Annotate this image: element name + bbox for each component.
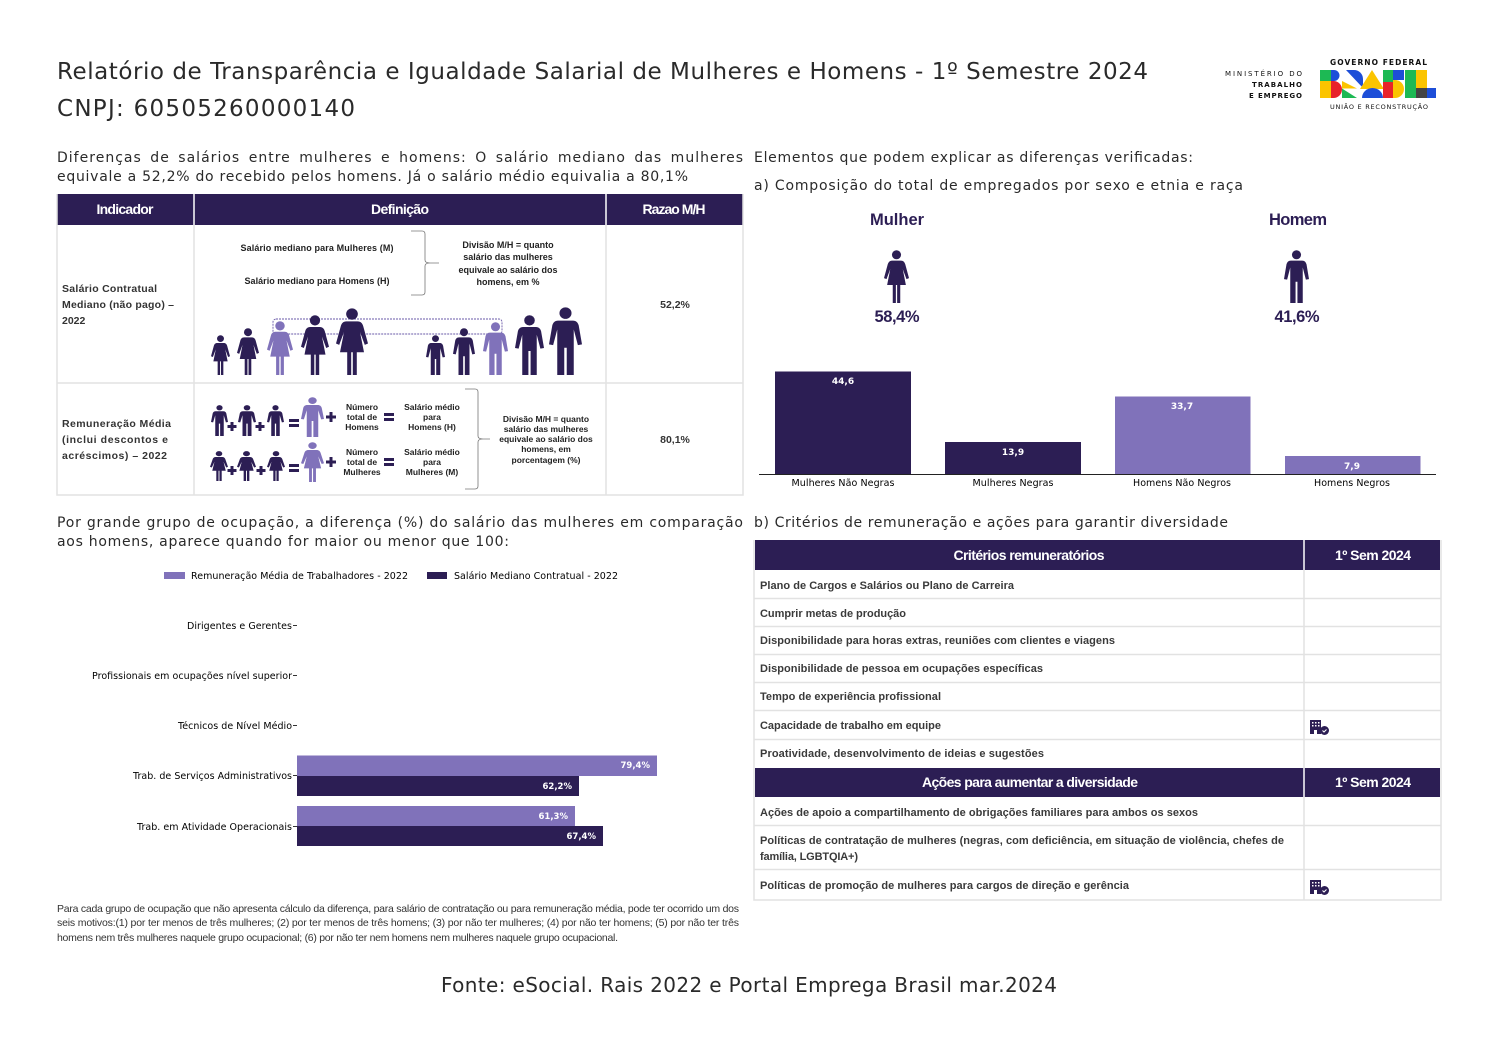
row: salário contratual mediano: Salário mediano para Homens (H) — [244, 276, 390, 286]
homem: Homem — [1269, 211, 1327, 229]
row: salário contratual mediano: 2022 — [62, 315, 86, 327]
row: salário contratual mediano: 52,2% — [660, 299, 691, 311]
bar chart: composição por etnia e raça: 33,7 — [1171, 402, 1193, 412]
rows: critérios: Capacidade de trabalho em equipe — [760, 720, 941, 732]
row: remuneração média: 80,1% — [660, 434, 691, 446]
rows: critérios: Cumprir metas de produção — [760, 608, 906, 620]
bar chart: ocupação: Trab. de Serviços Administrativos — [132, 771, 292, 782]
bar chart: composição por etnia e raça: 44,6 — [832, 377, 854, 387]
row: remuneração média: equivale ao salário dos — [499, 434, 593, 444]
heading: critérios de remuneração: b) Critérios de remuneração e ações para garantir diversidade — [754, 515, 1228, 531]
footnote: homens nem três mulheres naquele grupo ocupacional; (6) por não ter nem homens nem mulheres naquele grupo ocupacional. — [57, 932, 618, 944]
header: ações para aumentar a diversidade: Ações para aumentar a diversidade — [922, 774, 1138, 790]
title: CNPJ: 60505260000140 — [57, 96, 355, 122]
row: remuneração média: (inclui descontos e — [62, 434, 168, 446]
row: remuneração média: para — [423, 457, 441, 467]
header: critérios remuneratórios — [755, 540, 1440, 570]
logo: ministério e governo federal: UNIÃO E RECONSTRUÇÃO — [1330, 102, 1428, 111]
intro text: diferenças de salários — [57, 150, 743, 185]
panel: tabela de indicadores — [57, 194, 743, 495]
intro text: diferenças de salários: equivale a 52,2% do recebido pelos homens. Já o salário médio equivalia a 80,1% — [57, 169, 688, 185]
bar chart: ocupação: 79,4% — [620, 761, 650, 771]
logo: ministério e governo federal: E EMPREGO — [1249, 92, 1302, 100]
rows: critérios: Disponibilidade de pessoa em ocupações específicas — [760, 663, 1043, 675]
row: remuneração média: total de — [347, 457, 377, 467]
header: critérios remuneratórios: 1º Sem 2024 — [1335, 547, 1411, 563]
row: remuneração média: porcentagem (%) — [512, 455, 581, 465]
row: remuneração média: para — [423, 412, 441, 422]
icons: equação mulheres — [210, 442, 394, 482]
rows: critérios: Proatividade, desenvolvimento de ideias e sugestões — [760, 748, 1044, 760]
row: salário contratual mediano: Divisão M/H = quanto — [462, 240, 554, 250]
row: remuneração média: Remuneração Média — [62, 418, 171, 430]
row: salário contratual mediano: salário das mulheres — [463, 252, 553, 262]
bar chart: ocupação: Dirigentes e Gerentes — [187, 621, 292, 632]
rows: ações: Políticas de contratação de mulheres (negras, com deficiência, em situação de violência, chefes de — [760, 835, 1284, 847]
rows: critérios: Tempo de experiência profissional — [760, 691, 941, 703]
footnote: Para cada grupo de ocupação que não apresenta cálculo da diferença, para salário de contratação ou para remuneração média, pode ter ocorrido um dos — [57, 903, 739, 915]
legend: Remuneração Média de Trabalhadores - 2022 — [191, 571, 408, 582]
header: critérios remuneratórios: Critérios remuneratórios — [954, 547, 1105, 563]
homem — [1269, 211, 1327, 326]
row: remuneração média: Mulheres (M) — [406, 467, 458, 477]
rows: ações — [760, 807, 1284, 892]
rows: ações: Políticas de promoção de mulheres para cargos de direção e gerência — [760, 880, 1130, 892]
table header: Definição — [371, 201, 429, 217]
table header — [57, 194, 743, 225]
row: remuneração média: acréscimos) – 2022 — [62, 450, 167, 462]
heading: grande grupo de ocupação: aos homens, aparece quando for maior ou menor que 100: — [57, 534, 509, 550]
icon: empresa com verificação — [1310, 720, 1329, 735]
title — [57, 59, 1148, 122]
rows: critérios — [760, 580, 1115, 760]
footnote — [57, 903, 739, 944]
row: remuneração média: Número — [346, 402, 378, 412]
rows: critérios: Plano de Cargos e Salários ou Plano de Carreira — [760, 580, 1015, 592]
source: Fonte: eSocial. Rais 2022 e Portal Emprega Brasil mar.2024 — [441, 973, 1057, 997]
table header: Razao M/H — [642, 201, 706, 217]
row: salário contratual mediano: Mediano (não pago) – — [62, 299, 174, 311]
row: remuneração média: salário das mulheres — [504, 424, 589, 434]
icons: equação homens — [211, 397, 394, 437]
logo: ministério e governo federal: MINISTÉRIO DO — [1225, 69, 1302, 78]
row: remuneração média: Divisão M/H = quanto — [503, 414, 589, 424]
rows: ações: família, LGBTQIA+) — [760, 851, 858, 863]
bar chart: composição por etnia e raça: Homens Não Negros — [1133, 478, 1231, 489]
icon: empresa com verificação — [1310, 880, 1329, 895]
bar chart: ocupação: 67,4% — [566, 832, 596, 842]
row: salário contratual mediano — [62, 231, 691, 375]
icons: mulheres — [211, 308, 368, 375]
row: remuneração média: total de — [347, 412, 377, 422]
row: salário contratual mediano: Salário Contratual — [62, 283, 157, 295]
row: remuneração média: Salário médio — [404, 447, 460, 457]
bar chart: composição por etnia e raça: Mulheres Negras — [972, 478, 1054, 489]
mulher: 58,4% — [874, 308, 920, 326]
logo: ministério e governo federal — [1225, 58, 1436, 111]
rows: ações: Ações de apoio a compartilhamento de obrigações familiares para ambos os sexos — [760, 807, 1198, 819]
intro text: diferenças de salários: Diferenças de salários entre mulheres e homens: O salário mediano das mulheres — [57, 150, 743, 166]
legend: Salário Mediano Contratual - 2022 — [454, 571, 618, 582]
row: salário contratual mediano: Salário mediano para Mulheres (M) — [240, 243, 394, 253]
bar chart: ocupação: Trab. em Atividade Operacionais — [136, 822, 292, 833]
heading: grande grupo de ocupação: Por grande grupo de ocupação, a diferença (%) do salário das mulheres em comparação — [57, 515, 743, 531]
legend — [164, 571, 618, 582]
bar chart: composição por etnia e raça: Mulheres Não Negras — [792, 478, 895, 489]
title: Relatório de Transparência e Igualdade Salarial de Mulheres e Homens - 1º Semestre 2024 — [57, 59, 1148, 85]
bar chart: ocupação: Técnicos de Nível Médio — [177, 721, 292, 732]
heading: composição do total de empregados: a) Composição do total de empregados por sexo e etnia e raça — [754, 178, 1243, 194]
bar chart: ocupação: 62,2% — [542, 782, 572, 792]
bar chart: ocupação — [92, 621, 657, 846]
row: salário contratual mediano: homens, em % — [476, 277, 540, 287]
bar chart: composição por etnia e raça: Homens Negros — [1314, 478, 1390, 489]
logo: ministério e governo federal: GOVERNO FEDERAL — [1330, 58, 1427, 67]
row: salário contratual mediano: equivale ao salário dos — [458, 265, 558, 275]
bar chart: composição por etnia e raça: 13,9 — [1002, 448, 1024, 458]
homem: 41,6% — [1274, 308, 1320, 326]
heading: grande grupo de ocupação — [57, 515, 743, 550]
row: remuneração média: Salário médio — [404, 402, 460, 412]
heading: elementos que podem explicar: Elementos que podem explicar as diferenças verificadas: — [754, 150, 1193, 166]
mulher: Mulher — [870, 211, 925, 229]
icons: homens — [426, 307, 582, 375]
row: remuneração média — [62, 389, 691, 489]
bar chart: ocupação: Profissionais em ocupações nível superior — [92, 671, 292, 682]
footnote: seis motivos:(1) por ter menos de três mulheres; (2) por ter menos de três homens; (3) por não ter mulheres; (4) por não ter homens; (5) por não ter três — [57, 917, 739, 929]
row: remuneração média: Homens (H) — [408, 422, 456, 432]
mulher — [870, 211, 925, 326]
rows: critérios: Disponibilidade para horas extras, reuniões com clientes e viagens — [760, 635, 1115, 647]
row: remuneração média: Número — [346, 447, 378, 457]
row: remuneração média: Homens — [345, 422, 379, 432]
table header: Indicador — [96, 201, 154, 217]
bar chart: composição por etnia e raça — [759, 372, 1436, 489]
logo: ministério e governo federal: TRABALHO — [1252, 81, 1302, 89]
bar chart: ocupação: 61,3% — [538, 812, 568, 822]
header: ações para aumentar a diversidade — [755, 768, 1440, 797]
row: remuneração média: homens, em — [521, 444, 571, 454]
row: remuneração média: Mulheres — [343, 467, 381, 477]
header: ações para aumentar a diversidade: 1º Sem 2024 — [1335, 774, 1411, 790]
panel: composição por sexo — [870, 211, 1327, 326]
panel: critérios e ações — [754, 540, 1441, 900]
bar chart: composição por etnia e raça: 7,9 — [1344, 462, 1360, 472]
